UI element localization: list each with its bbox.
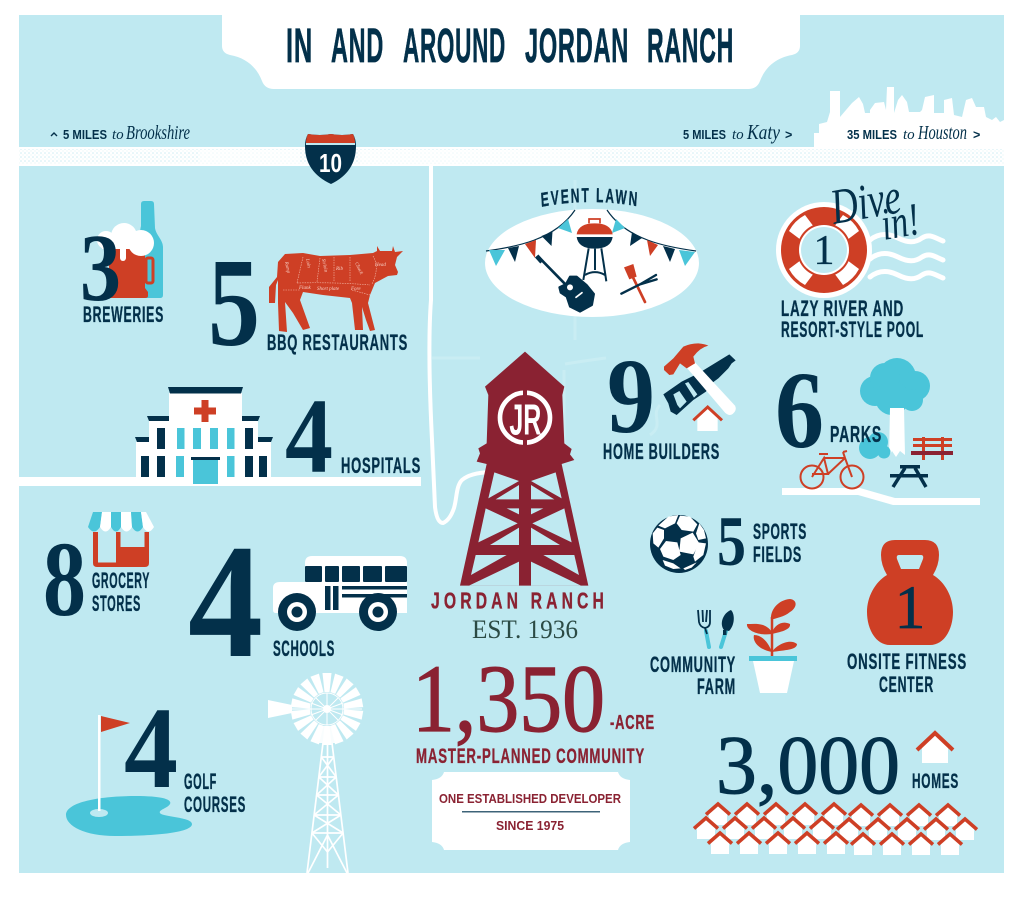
label: community farm: COMMUNITY [650,652,736,677]
label: master-planned community: MASTER-PLANNED COMMUNITY [416,745,645,768]
number 5: 5 [717,503,746,581]
to Brookshire [51,122,190,144]
icon: cow butcher chart: Rump [283,260,290,274]
skyline of Houston [814,87,1004,150]
to Katy: to [732,127,744,143]
icon: JR monogram [500,388,550,447]
developer ticket [432,772,630,850]
icon: interstate 10 shield [305,134,356,184]
icon: cow butcher chart: Short plate [317,287,340,292]
label: acre: -ACRE [610,712,655,734]
icon: cow butcher chart: Chuck [353,262,363,276]
to Katy: Katy [746,120,781,144]
icon: cow butcher chart: Loin [304,257,311,269]
icon: bicycle [800,451,864,488]
icon: tree [859,358,930,459]
label: golf courses [184,769,246,817]
label: established: EST. 1936 [472,614,578,644]
icon: bunting [486,210,696,266]
breweries group [80,201,164,327]
label: community farm [650,652,736,699]
text: since 1975: SINCE 1975 [496,819,564,833]
to Brookshire: Brookshire [126,122,190,144]
number 8: 8 [43,521,86,639]
icon: cow butcher chart: Sirloin [320,258,328,273]
text: one established developer: ONE ESTABLISHED DEVELOPER [439,792,621,806]
label: sports fields [753,519,807,567]
label: golf courses: GOLF [184,769,217,794]
label: grocery stores [92,568,150,616]
script: dive in: in! [877,193,923,250]
faint background roads [432,180,660,450]
ground line [782,488,980,505]
title banner: RANCH [647,20,734,73]
water tower logo [431,352,608,644]
number 3,000: 3,000 [716,719,900,812]
homes group [694,719,977,855]
icon: soccer ball [650,515,708,573]
icon: rows of houses [694,804,977,855]
title: AROUND [403,20,506,73]
label: sports fields: FIELDS [753,542,802,567]
sports fields group [650,503,807,581]
icon: JR monogram: JR [509,396,541,444]
to Houston: 35 MILES [847,128,897,142]
icon: small house [693,407,722,431]
icon: garden tools [698,610,734,647]
title banner [222,15,800,89]
icon: cow butcher chart [269,246,403,332]
label: hospitals: HOSPITALS [341,453,421,478]
to Houston: Houston [917,122,967,144]
to Houston: to [903,127,915,143]
label: community farm: FARM [697,674,736,699]
icon: golf green and flag [66,715,192,836]
label: lazy river [781,296,924,342]
icon: potted plant [747,599,797,693]
to Brookshire: 5 MILES [63,128,107,142]
icon: windmill [268,673,363,873]
icon: interstate 10 shield: 10 [319,148,342,178]
heading: event lawn: EVENT LAWN [541,188,637,207]
label: onsite fitness center [847,649,967,697]
label: breweries: BREWERIES [83,302,164,327]
icon: beer mug and foam [97,223,154,298]
title: AND [331,20,384,73]
grocery stores group [43,512,154,639]
icon: life ring: 1 [814,228,834,274]
label: sports fields: SPORTS [753,519,807,544]
label: parks: PARKS [830,421,882,447]
parks group [775,349,980,505]
event lawn group [485,188,699,317]
number 4: 4 [285,378,333,496]
number 1: 1 [895,575,925,642]
icon: picnic table [890,465,928,487]
label: schools: SCHOOLS [273,636,335,661]
fitness center group [847,540,967,697]
number 5: 5 [208,234,260,373]
number 6: 6 [775,349,824,471]
icon: kettlebell [867,540,953,645]
icon: large house [917,733,953,763]
community farm group [650,599,797,699]
number 4: 4 [188,512,263,692]
number 4: 4 [124,684,178,813]
icon: life ring [776,202,872,298]
icon: cow butcher chart: Flank [298,286,311,291]
label: home builders: HOME BUILDERS [603,439,720,464]
golf courses group [66,684,246,836]
to Katy: > [785,128,792,142]
title: IN [286,20,313,73]
icon: cow butcher chart: Fore [350,287,361,292]
icon: guitar [537,256,594,312]
acreage group [412,645,655,768]
heading: event lawn [541,188,637,207]
label: jordan ranch: JORDAN RANCH [431,588,608,614]
label: grocery stores: STORES [92,591,141,616]
lazy river group [776,168,943,342]
bbq restaurants group [208,234,408,373]
icon: school bus [273,556,407,631]
icon: hammer [664,343,736,415]
number 9: 9 [607,338,655,456]
icon: grill [577,219,613,281]
number 1,350: 1,350 [412,645,605,752]
icon: water tower [460,352,588,586]
icon: beer bottle [128,201,163,298]
to Brookshire: to [112,127,124,143]
title [286,20,734,73]
label: bbq restaurants: BBQ RESTAURANTS [267,330,408,355]
icon: cow butcher chart: Head [374,263,386,268]
icon: spatula and fork [621,264,657,302]
icon: saw [663,354,736,415]
side roads [19,166,490,523]
distance labels [51,120,980,144]
icon: waves [870,234,943,279]
title: JORDAN [525,20,629,73]
home builders group [603,338,736,464]
number 3: 3 [80,214,121,321]
label: lazy river: LAZY RIVER AND [781,296,904,321]
to Houston: > [973,128,980,142]
icon: lawn ellipse [485,209,699,317]
icon: grocery store [88,512,154,567]
schools group [188,512,407,692]
label: onsite fitness center: CENTER [879,672,934,697]
grocery stores group: GROCERY [92,568,150,593]
script: dive in: Dive [825,168,905,235]
icon: cow butcher chart: Rib [335,267,343,272]
to Katy: 5 MILES [683,128,726,142]
to Houston [847,122,980,144]
label: homes: HOMES [912,770,959,793]
hospitals group [135,378,421,496]
icon: hospital [135,387,273,484]
icon: bench [911,437,953,460]
to Katy [683,120,792,144]
label: golf courses: COURSES [184,792,246,817]
highway road [19,147,1004,166]
